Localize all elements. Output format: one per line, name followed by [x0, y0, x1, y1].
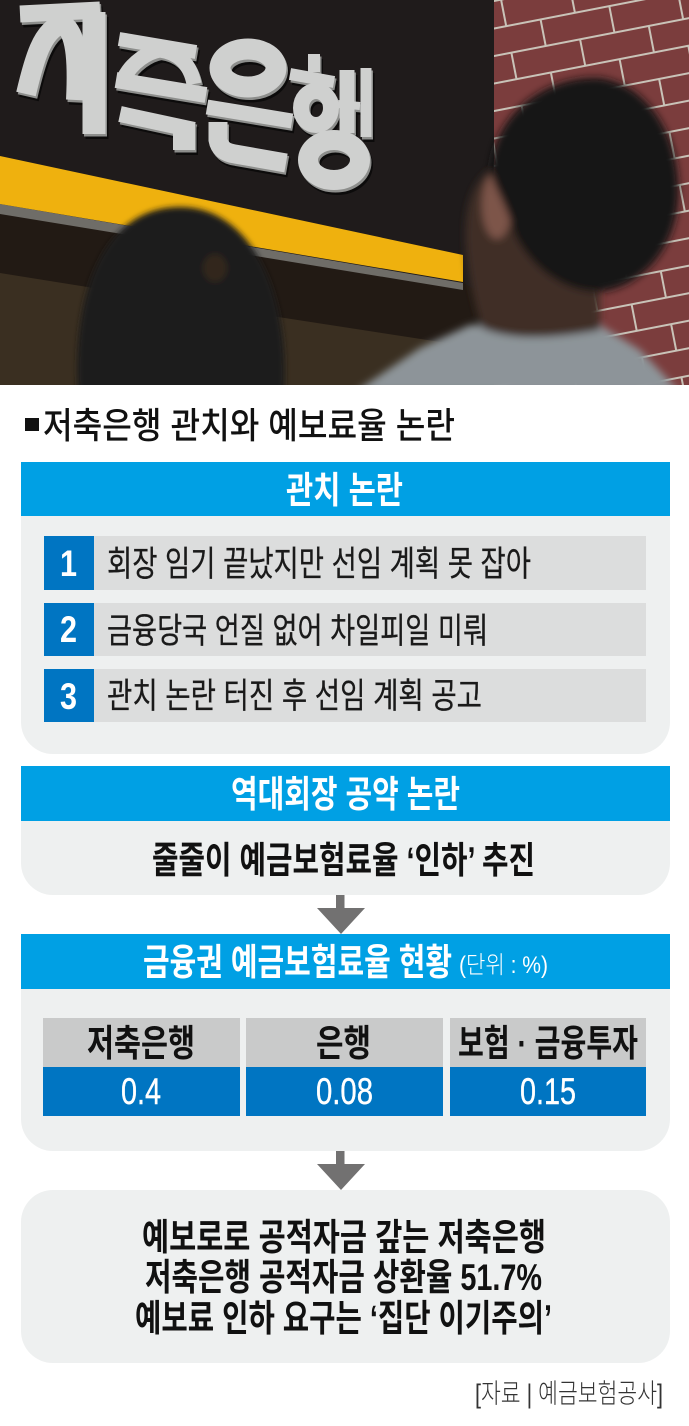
table column: insurance and financial investment: 0.15	[520, 1071, 576, 1112]
list row 1: 회장 임기 끝났지만 선임 계획 못 잡아	[107, 545, 531, 584]
table column: banks	[246, 1018, 443, 1116]
panel statement: 줄줄이 예금보험료율 ‘인하’ 추진	[152, 840, 535, 881]
panel: conclusion: 예보료 인하 요구는 ‘집단 이기주의’	[135, 1298, 552, 1339]
list row 3: 3	[60, 676, 77, 717]
list row 1: 1	[60, 543, 77, 584]
panel header	[21, 934, 670, 989]
table column: savings banks: 저축은행	[87, 1023, 195, 1064]
list row 3: 관치 논란 터진 후 선임 계획 공고	[107, 677, 482, 716]
panel: past chairmen pledges	[21, 766, 670, 895]
arrow down	[317, 1151, 365, 1190]
list row 3	[44, 669, 646, 722]
list row 2: 2	[60, 609, 77, 650]
panel: conclusion: 저축은행 공적자금 상환율 51.7%	[145, 1257, 542, 1298]
arrow down	[317, 895, 365, 934]
photo: savings bank sign and two people	[0, 0, 689, 392]
table column: savings banks: 0.4	[121, 1071, 161, 1112]
title: 저축은행 관치와 예보료율 논란	[43, 405, 455, 446]
list row 2: 금융당국 언질 없어 차일피일 미뤄	[107, 612, 488, 651]
list row 1	[44, 536, 646, 590]
list row 2	[44, 603, 646, 656]
table column: banks: 0.08	[316, 1071, 373, 1112]
panel header	[21, 462, 670, 516]
panel: conclusion: 예보로로 공적자금 갚는 저축은행	[142, 1217, 546, 1258]
table column: savings banks	[43, 1018, 240, 1116]
person at right	[355, 78, 680, 392]
panel header: (단위 : %)	[459, 952, 548, 979]
panel header: 관치 논란	[286, 470, 403, 511]
table column: insurance and financial investment: 보험 · 금융투자	[458, 1023, 638, 1064]
panel header: 역대회장 공약 논란	[231, 774, 460, 815]
panel header	[21, 766, 670, 821]
panel header: 금융권 예금보험료율 현황	[143, 942, 452, 983]
panel: deposit insurance rates	[21, 934, 670, 1151]
table column: insurance and financial investment	[450, 1018, 646, 1116]
person at left	[77, 207, 285, 392]
sign lettering	[20, 10, 369, 185]
table column: banks: 은행	[316, 1023, 371, 1064]
panel: governance controversy	[21, 462, 670, 754]
panel: conclusion	[21, 1190, 670, 1363]
